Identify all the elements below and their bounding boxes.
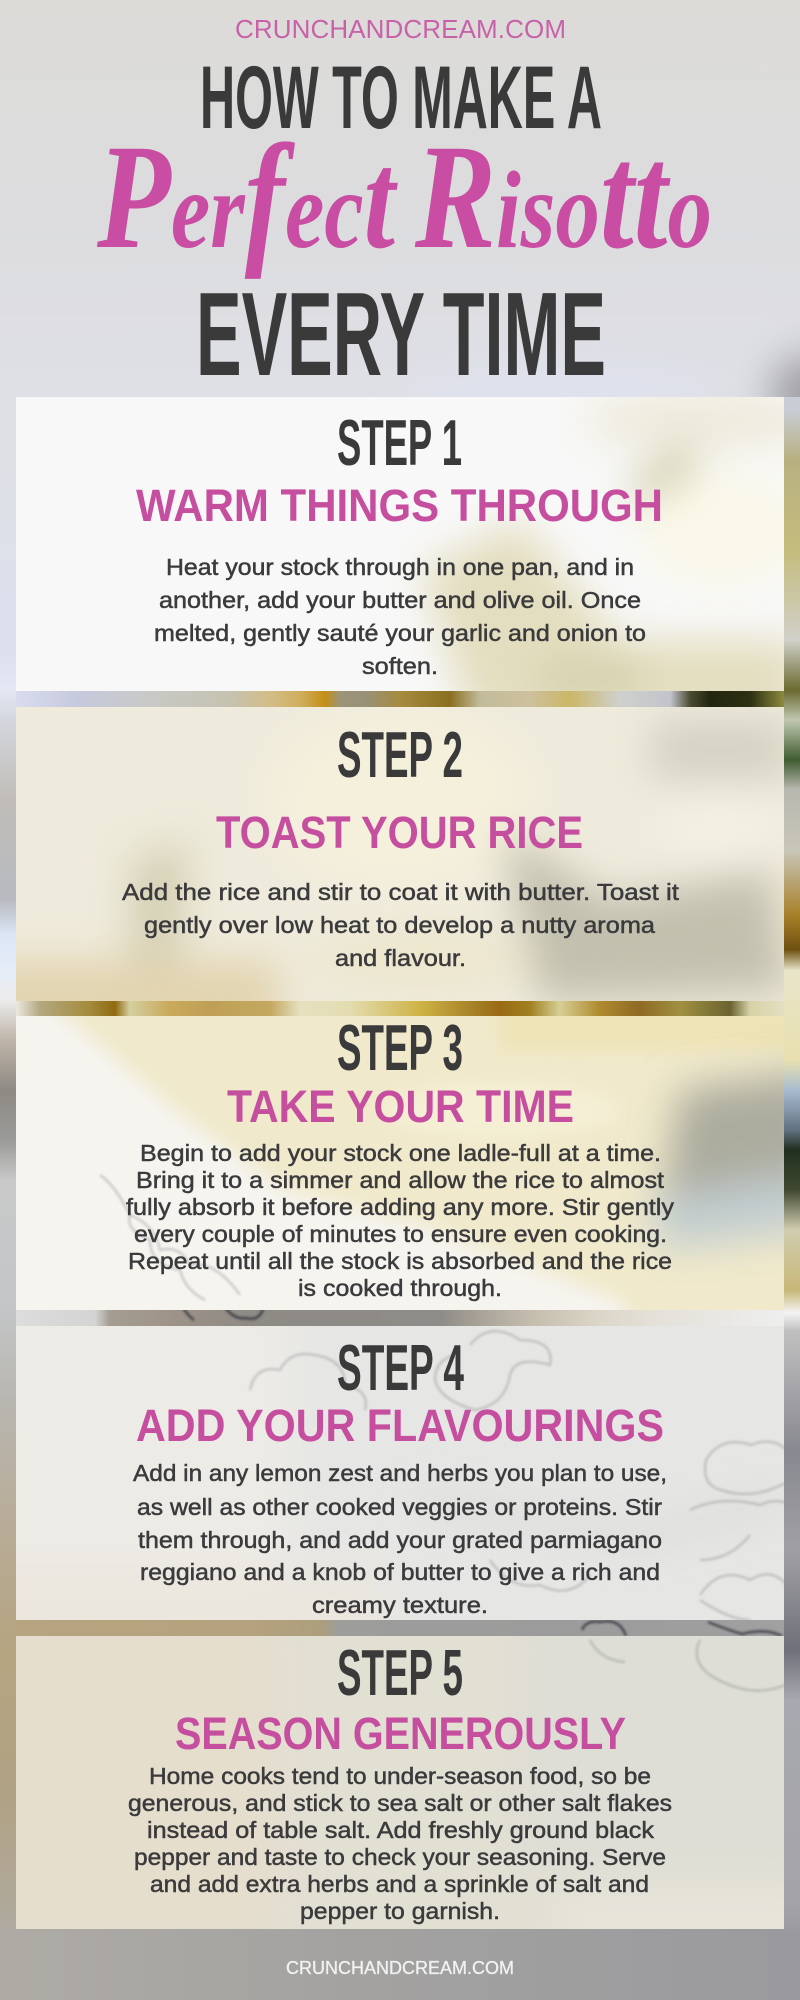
panel: step 2: STEP 2 (337, 718, 463, 791)
panel: step 4 (16, 1326, 784, 1620)
panel: step 5: Home cooks tend to under-season food, so be (149, 1763, 651, 1789)
panel: step 5: pepper and taste to check your seasoning. Serve (134, 1844, 666, 1870)
panel: step 3: is cooked through. (298, 1275, 502, 1301)
panel: step 4: Add in any lemon zest and herbs you plan to use, (133, 1460, 667, 1486)
footer site name: CRUNCHANDCREAM.COM (286, 1958, 514, 1978)
panel: step 4: reggiano and a knob of butter to give a rich and (140, 1559, 660, 1585)
panel: step 1: WARM THINGS THROUGH (136, 480, 663, 531)
title: How to make a Perfect Risotto every time: Risotto (414, 114, 712, 280)
panel: step 5: STEP 5 (337, 1636, 463, 1709)
panel: step 2: Add the rice and stir to coat it with butter. Toast it (122, 879, 680, 905)
panel: step 2 (16, 707, 784, 1001)
panel: step 4: ADD YOUR FLAVOURINGS (136, 1400, 664, 1451)
panel: step 5: and add extra herbs and a sprinkle of salt and (150, 1871, 649, 1897)
panel: step 5: SEASON GENEROUSLY (175, 1708, 626, 1759)
panel: step 3: Bring it to a simmer and allow the rice to almost (136, 1167, 664, 1193)
title: How to make a Perfect Risotto every time: Perfect (96, 114, 398, 280)
panel: step 3: Begin to add your stock one ladle-full at a time. (140, 1140, 661, 1166)
panel: step 2: TOAST YOUR RICE (216, 807, 583, 858)
panel: step 3: every couple of minutes to ensure even cooking. (134, 1221, 667, 1247)
panel: step 5: pepper to garnish. (300, 1898, 500, 1924)
panel: step 4: STEP 4 (337, 1331, 464, 1404)
panel: step 1: another, add your butter and olive oil. Once (159, 587, 641, 613)
panel: step 3 (16, 1016, 784, 1310)
panel: step 2: gently over low heat to develop a nutty aroma (144, 912, 656, 938)
panel: step 3: Repeat until all the stock is absorbed and the rice (128, 1248, 672, 1274)
panel: step 5 (16, 1636, 784, 1929)
panel: step 3: STEP 3 (337, 1011, 463, 1084)
panel: step 4: as well as other cooked veggies or proteins. Stir (137, 1494, 662, 1520)
site name header: CRUNCHANDCREAM.COM (235, 14, 566, 44)
panel: step 1: melted, gently sauté your garlic and onion to (154, 620, 646, 646)
panel: step 1: Heat your stock through in one pan, and in (166, 554, 634, 580)
panel: step 4: them through, and add your grated parmiagano (138, 1527, 662, 1553)
panel: step 3: TAKE YOUR TIME (227, 1081, 574, 1132)
panel: step 1: soften. (362, 653, 438, 679)
panel: step 3: fully absorb it before adding any more. Stir gently (126, 1194, 674, 1220)
panel: step 2: and flavour. (335, 945, 466, 971)
title: How to make a Perfect Risotto every time (96, 47, 712, 401)
panel: step 1 (16, 397, 784, 691)
panel: step 4: creamy texture. (312, 1592, 488, 1618)
panel: step 1: STEP 1 (337, 406, 462, 479)
panel: step 5: generous, and stick to sea salt or other salt flakes (128, 1790, 672, 1816)
panel: step 5: instead of table salt. Add freshly ground black (147, 1817, 654, 1843)
